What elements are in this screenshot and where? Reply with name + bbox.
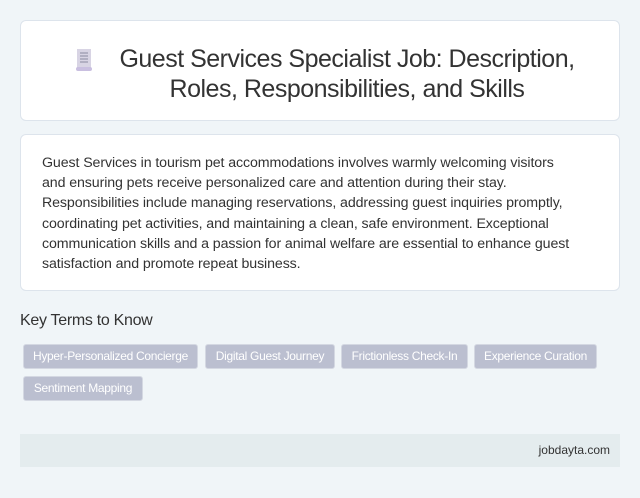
footer text: jobdayta.com — [539, 443, 610, 457]
header card — [20, 20, 620, 121]
tag 3: Frictionless Check-In — [352, 349, 457, 363]
title: Guest Services Specialist Job: Description, Roles, Responsibilities, and Skills — [119, 45, 575, 103]
tag 1: Hyper-Personalized Concierge — [33, 349, 188, 363]
tag 4 — [474, 344, 597, 369]
description text: Guest Services in tourism pet accommodations involves warmly welcoming visitors and ensuring pets receive personalized care and attention during their stay. Responsibilities include managing reservations, addressing guest inquiries promptly, coordinating pet activities, and maintaining a clean, safe environment. Exceptional communication skills and a passion for animal welfare are essential to enhance guest satisfaction and promote repeat business. — [42, 155, 569, 272]
tag 2: Digital Guest Journey — [216, 349, 324, 363]
tag 5 — [23, 376, 143, 401]
tag 1 — [23, 344, 198, 369]
tag 3 — [341, 344, 468, 369]
tag 4: Experience Curation — [484, 349, 587, 363]
key terms heading: Key Terms to Know — [20, 312, 152, 329]
icon: document — [76, 49, 92, 71]
tag 5: Sentiment Mapping — [34, 381, 132, 395]
tag 2 — [205, 344, 335, 369]
description card — [20, 134, 620, 291]
footer — [20, 434, 620, 467]
